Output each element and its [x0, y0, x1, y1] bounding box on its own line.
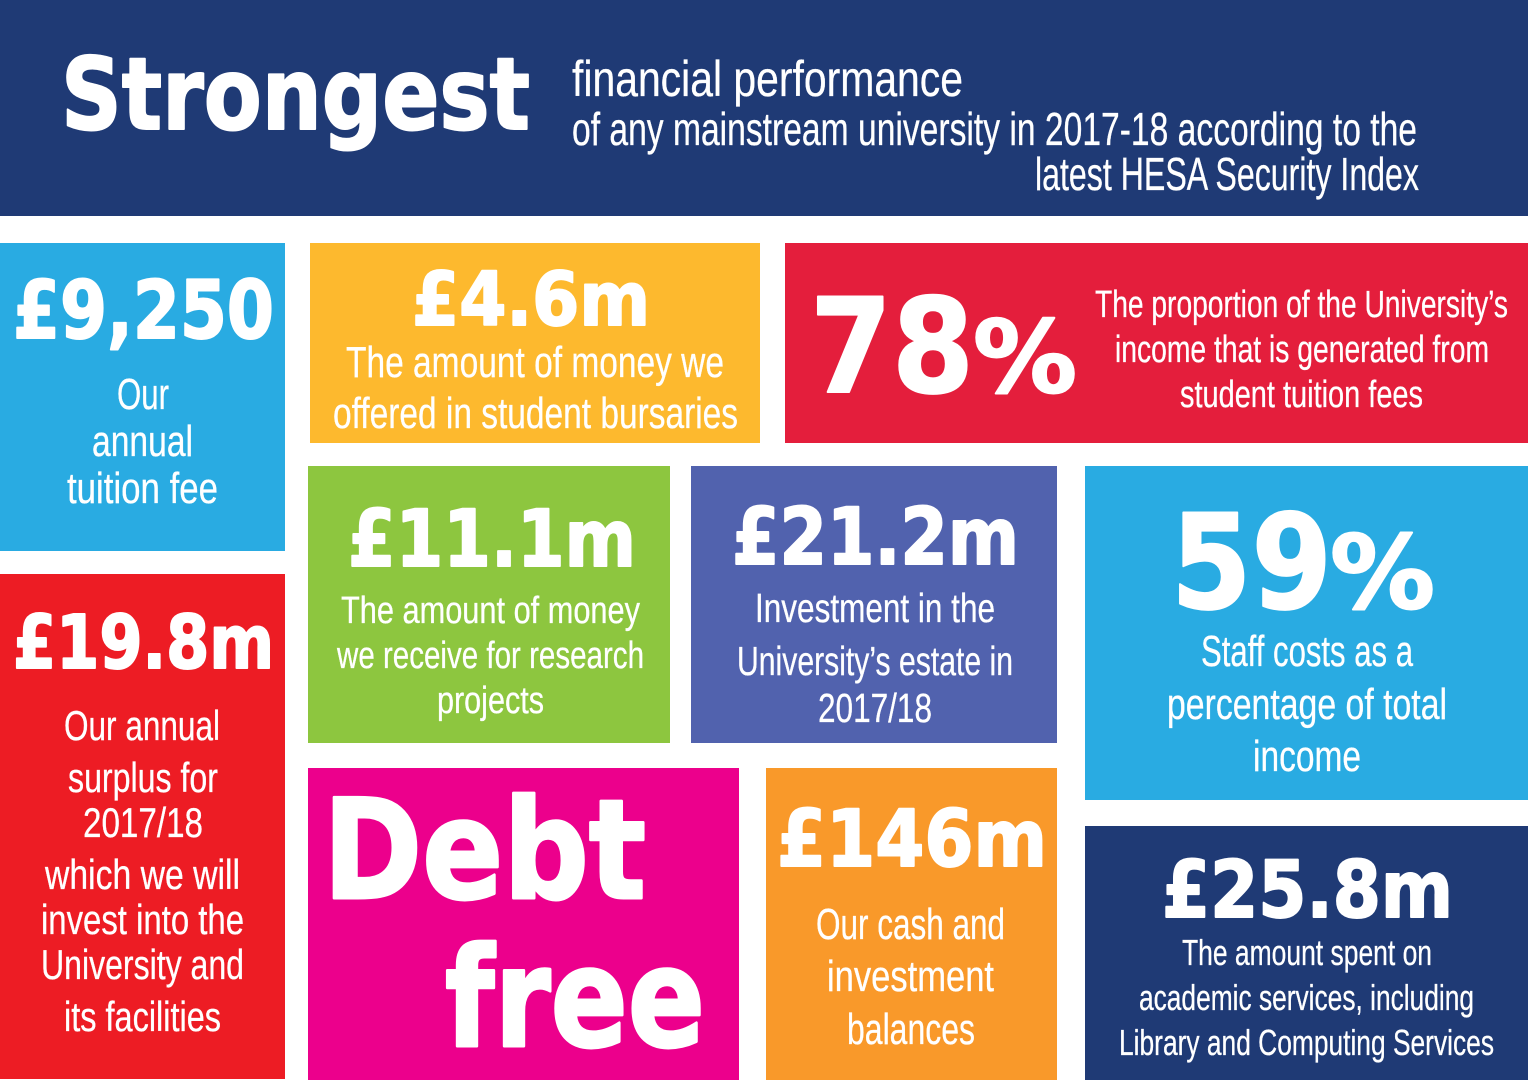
- panel: cash and investments: [766, 768, 1057, 1080]
- figure: £146m: £146m: [777, 795, 1047, 885]
- heading: Debt free: free: [445, 918, 705, 1079]
- text block: bursaries description: The amount of money we: [346, 338, 724, 387]
- figure: £21.2m: £21.2m: [732, 493, 1019, 583]
- figure: 78%: [810, 270, 1077, 423]
- text block: surplus description: surplus for: [68, 754, 218, 801]
- figure: £19.8m: £19.8m: [13, 600, 274, 686]
- figure: £25.8m: £25.8m: [1162, 846, 1453, 936]
- panel: tuition fee income proportion: [785, 243, 1528, 443]
- panel: debt free: [308, 768, 739, 1080]
- text block: income proportion description: [1095, 284, 1508, 416]
- text block: staff costs description: income: [1253, 732, 1361, 781]
- text block: staff costs description: Staff costs as a: [1201, 627, 1413, 676]
- text block: cash description: Our cash and: [816, 900, 1005, 949]
- panel: annual surplus: [0, 574, 285, 1079]
- text block: academic services description: The amount spent on: [1182, 932, 1432, 973]
- text block: surplus description: invest into the: [41, 896, 244, 943]
- heading: Strongest: Strongest: [61, 36, 530, 153]
- text block: research description: [336, 590, 644, 722]
- text block: surplus description: 2017/18: [83, 799, 203, 846]
- heading: Debt free: Debt: [323, 770, 646, 931]
- figure: 59%: [1171, 486, 1435, 639]
- panel: tuition fee: [0, 243, 285, 551]
- text block: header description: [572, 51, 1419, 200]
- text block: estate description: [737, 585, 1013, 731]
- text block: estate description: Investment in the: [755, 585, 995, 631]
- panel: student bursaries: [310, 243, 760, 443]
- panel: staff costs: [1085, 466, 1528, 800]
- text block: research description: The amount of money: [341, 590, 640, 632]
- text block: academic services description: [1119, 932, 1494, 1063]
- text block: cash description: investment: [827, 952, 994, 1001]
- text block: income proportion description: student tuition fees: [1180, 374, 1423, 416]
- panel: header banner: [0, 0, 1528, 216]
- text block: cash description: [816, 900, 1005, 1054]
- text block: surplus description: its facilities: [64, 993, 221, 1040]
- text block: staff costs description: [1167, 627, 1447, 781]
- text block: staff costs description: percentage of total: [1167, 680, 1447, 729]
- figure: 59%: 59: [1171, 486, 1332, 639]
- figure: 78%: %: [973, 299, 1077, 416]
- panel: academic services: [1085, 826, 1528, 1080]
- text block: surplus description: which we will: [44, 851, 240, 898]
- figure: 78%: 78: [810, 270, 974, 423]
- text block: bursaries description: [333, 338, 738, 438]
- panel: research projects: [308, 466, 670, 743]
- text block: tuition fee description: [67, 370, 218, 513]
- figure: £11.1m: £11.1m: [348, 495, 636, 585]
- figure: £4.6m: £4.6m: [412, 257, 650, 343]
- text block: estate description: 2017/18: [818, 685, 932, 731]
- text block: cash description: balances: [847, 1005, 975, 1054]
- text block: bursaries description: offered in student bursaries: [333, 389, 738, 438]
- text block: estate description: University’s estate in: [737, 638, 1013, 684]
- figure: £9,250: £9,250: [13, 264, 274, 357]
- text block: tuition fee description: tuition fee: [67, 464, 218, 513]
- text block: surplus description: [41, 702, 244, 1040]
- text block: tuition fee description: annual: [92, 417, 193, 466]
- text block: header description: financial performance: [572, 51, 963, 107]
- text block: research description: we receive for research: [336, 635, 644, 677]
- text block: tuition fee description: Our: [117, 370, 169, 419]
- text block: research description: projects: [437, 680, 544, 722]
- heading: Debt free: [323, 770, 705, 1079]
- figure: 59%: %: [1330, 514, 1435, 633]
- text block: surplus description: University and: [41, 941, 244, 988]
- panel: estate investment: [691, 466, 1057, 743]
- text block: surplus description: Our annual: [64, 702, 220, 749]
